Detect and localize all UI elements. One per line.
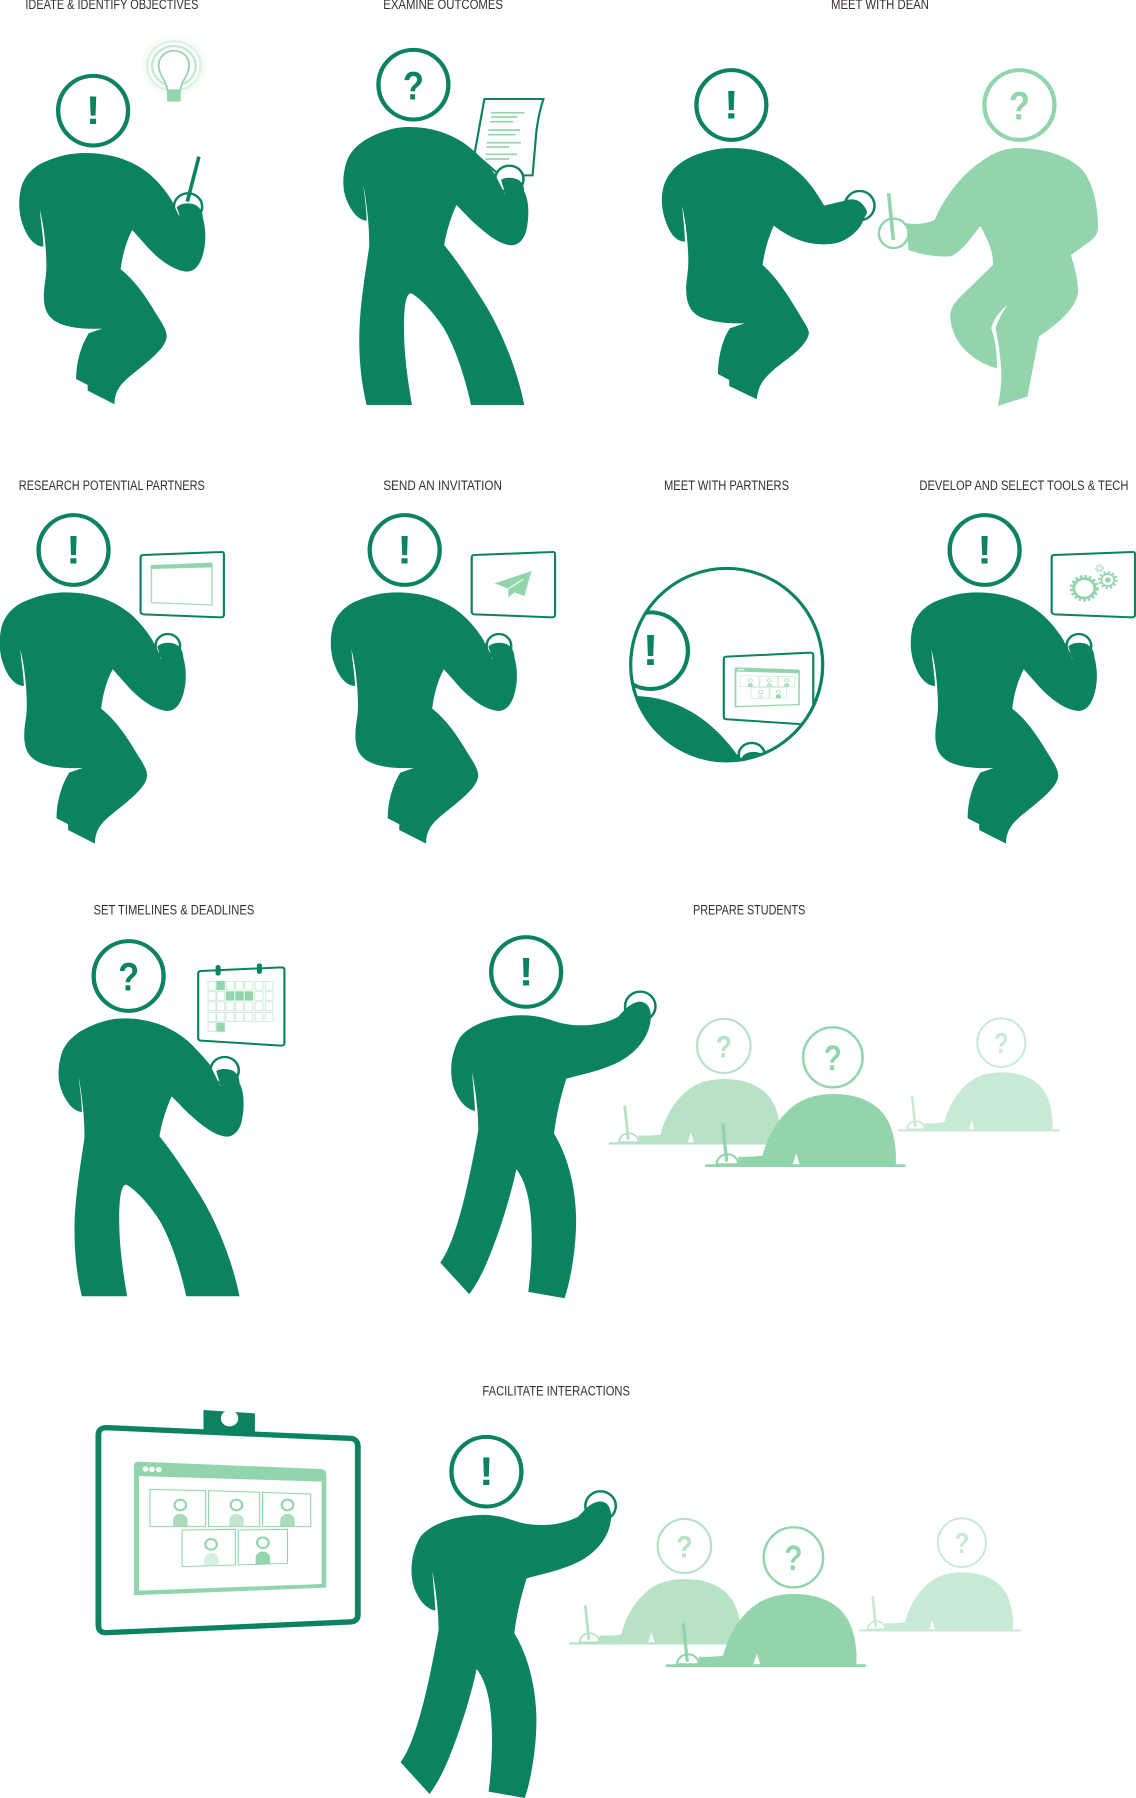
- head: question: ?: [403, 63, 424, 108]
- body: [331, 592, 517, 844]
- head: exclamation: !: [397, 527, 412, 572]
- student: front: [666, 1527, 866, 1667]
- student: front: [705, 1027, 906, 1167]
- figure: person with browser screen: [0, 515, 224, 844]
- head: exclamation: [634, 610, 690, 691]
- hand ring: [155, 634, 180, 658]
- figure: two people meeting: [662, 70, 1098, 406]
- hand ring: [625, 992, 655, 1021]
- head: exclamation: !: [519, 949, 533, 994]
- icon: large video screen with webcam: [98, 1410, 358, 1633]
- heading: research: RESEARCH POTENTIAL PARTNERS: [19, 478, 205, 493]
- panel: ideate and identify objectives: [19, 0, 207, 404]
- head: exclamation: [58, 76, 128, 145]
- head: question light: ?: [1009, 83, 1030, 128]
- student: front: ?: [824, 1038, 842, 1078]
- body fragment: [638, 696, 761, 760]
- panel: set timelines and deadlines: [59, 903, 284, 1296]
- panel: send an invitation: [331, 478, 555, 844]
- head: exclamation: !: [724, 82, 739, 127]
- hand ring: [210, 1057, 239, 1084]
- body: [401, 1501, 611, 1798]
- panel: develop and select tools and tech: [911, 478, 1135, 844]
- figure: person with gears screen: [911, 515, 1135, 844]
- figure: teacher pointing: [440, 937, 655, 1298]
- panel: research potential partners: [0, 478, 224, 844]
- hand ring: [1067, 634, 1091, 658]
- icon: calendar: [198, 963, 284, 1046]
- pen: [187, 157, 199, 202]
- panel: examine outcomes: [343, 0, 543, 405]
- body: [343, 127, 528, 405]
- head: exclamation: !: [977, 527, 992, 572]
- student: back left: [609, 1019, 789, 1145]
- panel: meet with partners: [613, 478, 823, 770]
- head: exclamation: [39, 515, 109, 585]
- head: exclamation: [370, 515, 440, 585]
- head: question: [378, 50, 448, 119]
- head: exclamation: [491, 937, 561, 1007]
- panel: facilitate interactions: [98, 1383, 1021, 1798]
- head: exclamation: [696, 70, 766, 140]
- hand ring: [487, 634, 511, 658]
- heading: facilitate: FACILITATE INTERACTIONS: [482, 1383, 630, 1398]
- student: front: ?: [784, 1538, 802, 1578]
- hand ring: [174, 193, 202, 220]
- heading: timelines: SET TIMELINES & DEADLINES: [94, 903, 254, 918]
- head: question: [94, 941, 164, 1011]
- figure: person with pen and lightbulb: [19, 36, 207, 404]
- figure: teacher pointing: [401, 1437, 616, 1798]
- hand ring light: [879, 219, 909, 248]
- hand ring dark: [845, 191, 875, 220]
- group: three students: [569, 1518, 1021, 1667]
- body: [911, 592, 1097, 844]
- icon: screen with video call: [724, 653, 813, 725]
- head: exclamation: !: [643, 625, 659, 675]
- heading: prepare: PREPARE STUDENTS: [693, 903, 805, 918]
- body: [440, 1002, 651, 1298]
- icon: screen with browser window: [141, 552, 224, 617]
- figure: person with calendar: [59, 941, 284, 1296]
- body: [0, 592, 186, 844]
- panel: meet with dean: [662, 0, 1098, 406]
- group: three students: [609, 1018, 1060, 1167]
- hand ring: [495, 166, 524, 192]
- heading: partners: MEET WITH PARTNERS: [664, 478, 789, 493]
- lens ring: [631, 568, 823, 761]
- head: exclamation: [950, 515, 1020, 585]
- student: back left: ?: [676, 1529, 693, 1564]
- student: back left: [569, 1519, 750, 1645]
- head: question: ?: [118, 954, 139, 999]
- body light: [907, 148, 1098, 406]
- head: question light: [984, 70, 1054, 140]
- body: [19, 153, 205, 404]
- body: [59, 1018, 244, 1296]
- hand ring: [585, 1491, 616, 1521]
- student: back right: [898, 1018, 1060, 1131]
- head: exclamation: [451, 1437, 521, 1506]
- icon: document: [475, 99, 543, 175]
- icon: screen with paper plane: [472, 552, 555, 617]
- body dark: [662, 148, 867, 399]
- student: back left: ?: [716, 1029, 732, 1064]
- figure: person reading document: [343, 50, 543, 405]
- figure: magnified lens: [613, 568, 823, 770]
- head: exclamation: !: [86, 88, 100, 133]
- student: back right: ?: [994, 1028, 1009, 1060]
- figure: person with paper plane screen: [331, 515, 555, 844]
- pen light: [889, 193, 893, 240]
- hand ring: [737, 742, 766, 758]
- head: exclamation: !: [66, 527, 81, 572]
- heading: send: SEND AN INVITATION: [383, 478, 502, 493]
- panel: prepare students: [440, 903, 1060, 1298]
- student: back right: ?: [955, 1528, 969, 1560]
- head: exclamation: !: [479, 1449, 494, 1494]
- icon: lightbulb: [141, 36, 207, 102]
- icon: screen with gears: [1052, 552, 1135, 617]
- lens contents: [634, 610, 814, 760]
- student: back right: [858, 1518, 1021, 1631]
